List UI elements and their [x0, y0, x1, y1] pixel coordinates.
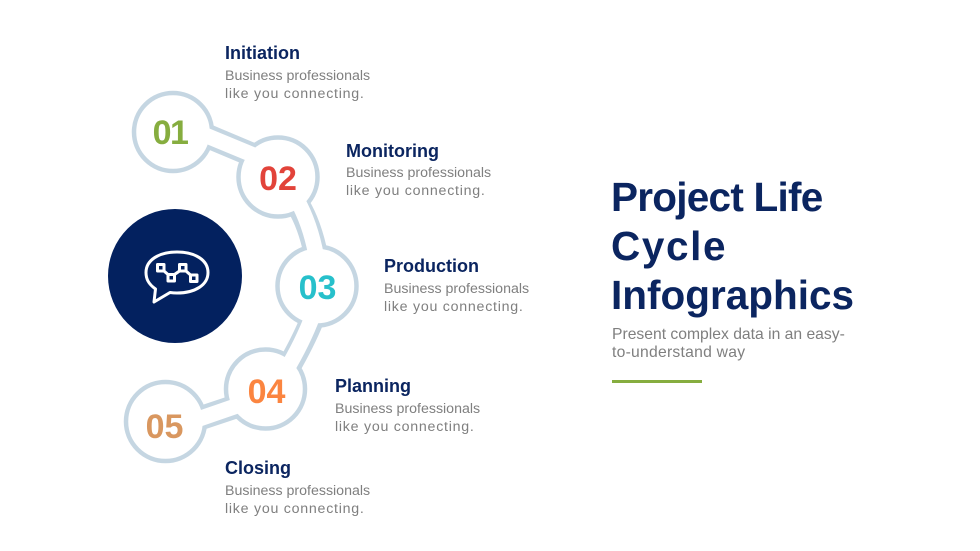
step 5 text: like you connecting.	[225, 500, 365, 516]
step 5 text	[225, 483, 370, 516]
step 2 text: like you connecting.	[346, 182, 486, 198]
step 2 text: Business professionals	[346, 165, 491, 181]
step 3 text: like you connecting.	[384, 298, 524, 314]
title: Infographics	[611, 272, 854, 318]
number 05: 05	[146, 408, 183, 446]
step 4 heading: Planning	[335, 376, 411, 396]
step 4 text: like you connecting.	[335, 418, 475, 434]
step 1 text	[225, 68, 370, 102]
subtitle: to-understand way	[612, 344, 745, 361]
step 3 text	[384, 281, 529, 314]
step 1 heading: Initiation	[225, 43, 300, 63]
step 3 text: Business professionals	[384, 281, 529, 297]
title: Cycle	[611, 223, 727, 269]
number 02: 02	[259, 160, 297, 198]
step 2 heading: Monitoring	[346, 141, 439, 161]
subtitle: Present complex data in an easy-	[612, 326, 845, 343]
title: Project Life	[611, 174, 823, 220]
number 03: 03	[299, 269, 336, 307]
subtitle	[612, 326, 845, 361]
title	[611, 174, 854, 318]
number 04: 04	[248, 373, 285, 411]
step 1 text: like you connecting.	[225, 86, 365, 102]
green accent bar	[612, 380, 702, 383]
icon: speech bubble	[146, 252, 208, 302]
step 5 heading: Closing	[225, 458, 291, 478]
step 3 heading: Production	[384, 256, 479, 276]
step 5 text: Business professionals	[225, 483, 370, 499]
step 4 text: Business professionals	[335, 401, 480, 417]
central navy circle	[108, 209, 242, 343]
number 01: 01	[153, 114, 188, 152]
step 2 text	[346, 165, 491, 198]
step 4 text	[335, 401, 480, 434]
chain outline	[126, 93, 356, 461]
step 1 text: Business professionals	[225, 68, 370, 84]
